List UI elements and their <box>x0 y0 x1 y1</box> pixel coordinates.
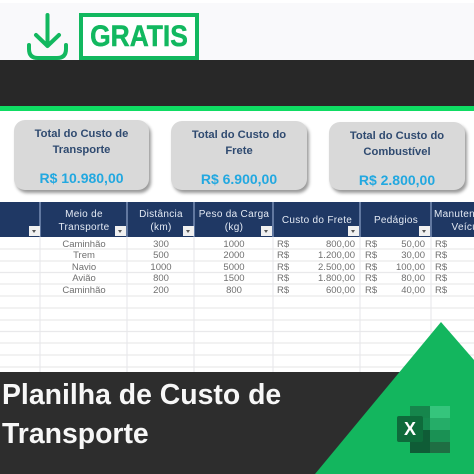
table rows: R$ <box>365 250 377 261</box>
table header labels: Transporte <box>58 222 109 233</box>
table header labels: (kg) <box>225 222 243 233</box>
table rows: Avião <box>72 273 96 284</box>
table rows: 100,00 <box>396 262 425 273</box>
spreadsheet table <box>0 202 474 372</box>
table rows <box>62 239 447 296</box>
icon: download arrow <box>27 13 68 60</box>
title: Transporte <box>2 418 149 450</box>
table rows: 800,00 <box>326 239 355 250</box>
table rows: R$ <box>435 250 447 261</box>
icon: Excel logo <box>397 406 450 453</box>
table rows: R$ <box>435 262 447 273</box>
top background strip <box>0 3 474 60</box>
table header labels: Distância <box>139 209 183 220</box>
table rows: 1.800,00 <box>318 273 355 284</box>
table rows: R$ <box>365 285 377 296</box>
table rows: 1500 <box>223 273 245 284</box>
filter buttons <box>29 226 430 236</box>
table rows: R$ <box>435 273 447 284</box>
card: total custo do frete: R$ 6.900,00 <box>201 171 277 187</box>
card: total custo do combustivel: Total do Custo do <box>350 130 444 142</box>
table rows: R$ <box>277 285 289 296</box>
green triangle <box>315 322 474 474</box>
table rows: R$ <box>277 239 289 250</box>
table rows: Caminhão <box>62 239 106 250</box>
table rows: Trem <box>73 250 95 261</box>
card: total custo do frete: Total do Custo do <box>192 129 286 141</box>
table rows: 600,00 <box>326 285 355 296</box>
title: Planilha de Custo de <box>2 379 281 411</box>
card: total custo do frete <box>171 121 307 190</box>
table header labels: Peso da Carga <box>199 209 269 220</box>
table rows: R$ <box>435 239 447 250</box>
card: total custo do combustivel: R$ 2.800,00 <box>359 172 435 188</box>
table rows: 80,00 <box>401 273 425 284</box>
table rows: R$ <box>365 262 377 273</box>
table rows: 300 <box>153 239 169 250</box>
card: total custo do combustivel: Combustível <box>363 146 431 158</box>
icon: Excel logo: X <box>404 419 416 439</box>
table rows: R$ <box>365 273 377 284</box>
table rows: 30,00 <box>401 250 425 261</box>
table rows: Navio <box>72 262 96 273</box>
dark title band <box>0 372 474 474</box>
table rows: R$ <box>435 285 447 296</box>
table header labels: Custo do Frete <box>282 215 352 226</box>
table rows: 2.500,00 <box>318 262 355 273</box>
table header labels: Meio de <box>65 209 103 220</box>
table rows: 800 <box>153 273 169 284</box>
card: total custo de transporte: Total do Custo de <box>35 128 128 140</box>
table rows: R$ <box>277 273 289 284</box>
table rows: 1.200,00 <box>318 250 355 261</box>
table rows: R$ <box>277 250 289 261</box>
table rows: 50,00 <box>401 239 425 250</box>
table rows: R$ <box>365 239 377 250</box>
table rows: 500 <box>153 250 169 261</box>
table rows: 800 <box>226 285 242 296</box>
table rows: R$ <box>277 262 289 273</box>
badge: GRATIS: GRATIS <box>90 20 188 53</box>
table rows: 2000 <box>223 250 245 261</box>
table rows: 1000 <box>150 262 172 273</box>
title <box>2 379 281 450</box>
table header labels: (km) <box>150 222 172 233</box>
table header labels: Pedágios <box>374 215 418 226</box>
table header labels <box>58 209 474 233</box>
table rows: Caminhão <box>62 285 106 296</box>
table rows: 5000 <box>223 262 245 273</box>
green stripe <box>0 106 474 111</box>
card: total custo do frete: Frete <box>225 145 253 157</box>
table rows: 200 <box>153 285 169 296</box>
card: total custo de transporte <box>14 120 149 190</box>
dark banner <box>0 60 474 106</box>
card: total custo de transporte: R$ 10.980,00 <box>39 170 124 186</box>
card: total custo do combustivel <box>329 122 465 190</box>
table rows: 40,00 <box>401 285 425 296</box>
badge: GRATIS <box>79 13 199 60</box>
card: total custo de transporte: Transporte <box>53 144 110 156</box>
table rows: 1000 <box>223 239 245 250</box>
